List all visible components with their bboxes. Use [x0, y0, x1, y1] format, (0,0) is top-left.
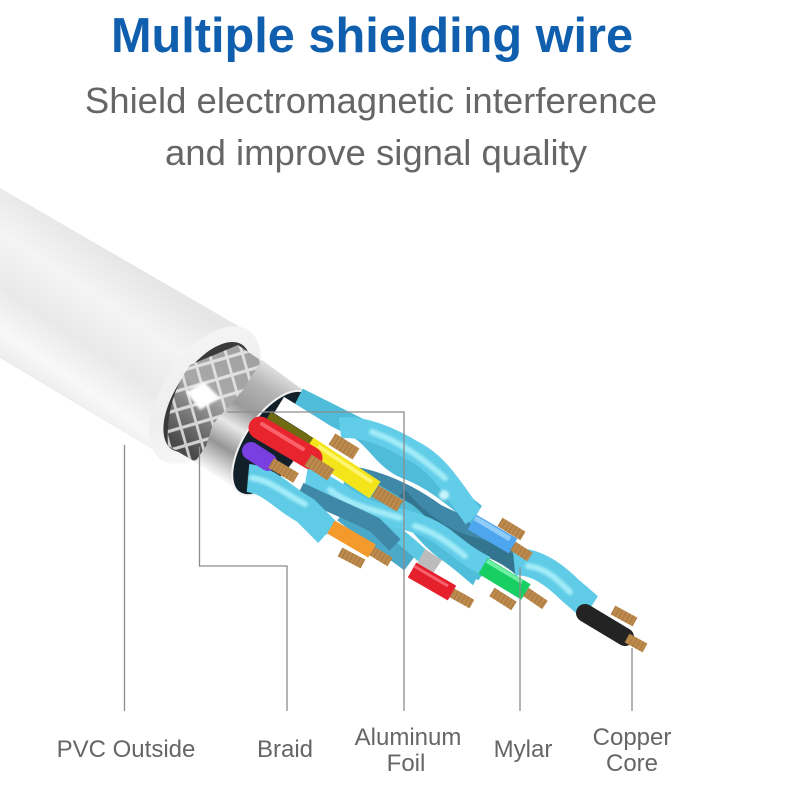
middle twisted pair ending in green and white wires — [306, 478, 545, 606]
foil opening — [216, 378, 330, 508]
inner coloured wires — [251, 405, 400, 506]
leader line: mylar — [519, 567, 521, 711]
rear twisted pair ending in black and white wires — [345, 475, 645, 648]
label: Copper Core — [593, 724, 671, 777]
leader line: PVC — [124, 445, 126, 711]
middle twisted pair ending in red wire — [345, 510, 472, 604]
label: Aluminum Foil — [355, 724, 461, 777]
label: Aluminum Foil: Foil — [387, 750, 425, 777]
subtitle: Shield electromagnetic interference — [85, 80, 657, 121]
subtitle: and improve signal quality — [165, 132, 588, 173]
lower twisted pair: orange and white — [248, 478, 395, 564]
label: Copper Core: Core — [606, 750, 658, 777]
label: Copper Core: Copper — [593, 724, 671, 751]
leader line: copper core — [631, 648, 633, 711]
subtitle — [85, 80, 657, 173]
label: Braid: Braid — [257, 736, 313, 763]
label: PVC Outside: PVC Outside — [57, 736, 195, 763]
title: Multiple shielding wire — [111, 9, 633, 63]
label: Aluminum Foil: Aluminum — [355, 724, 461, 751]
cable illustration — [0, 188, 645, 648]
PVC outer jacket — [0, 188, 283, 483]
aluminum foil tube — [195, 360, 307, 492]
leader line: braid — [200, 447, 287, 711]
braid shield — [163, 342, 262, 462]
leader line: aluminum foil — [227, 412, 404, 711]
top twisted pair: blue and white — [298, 398, 530, 557]
label: Mylar: Mylar — [494, 736, 552, 763]
